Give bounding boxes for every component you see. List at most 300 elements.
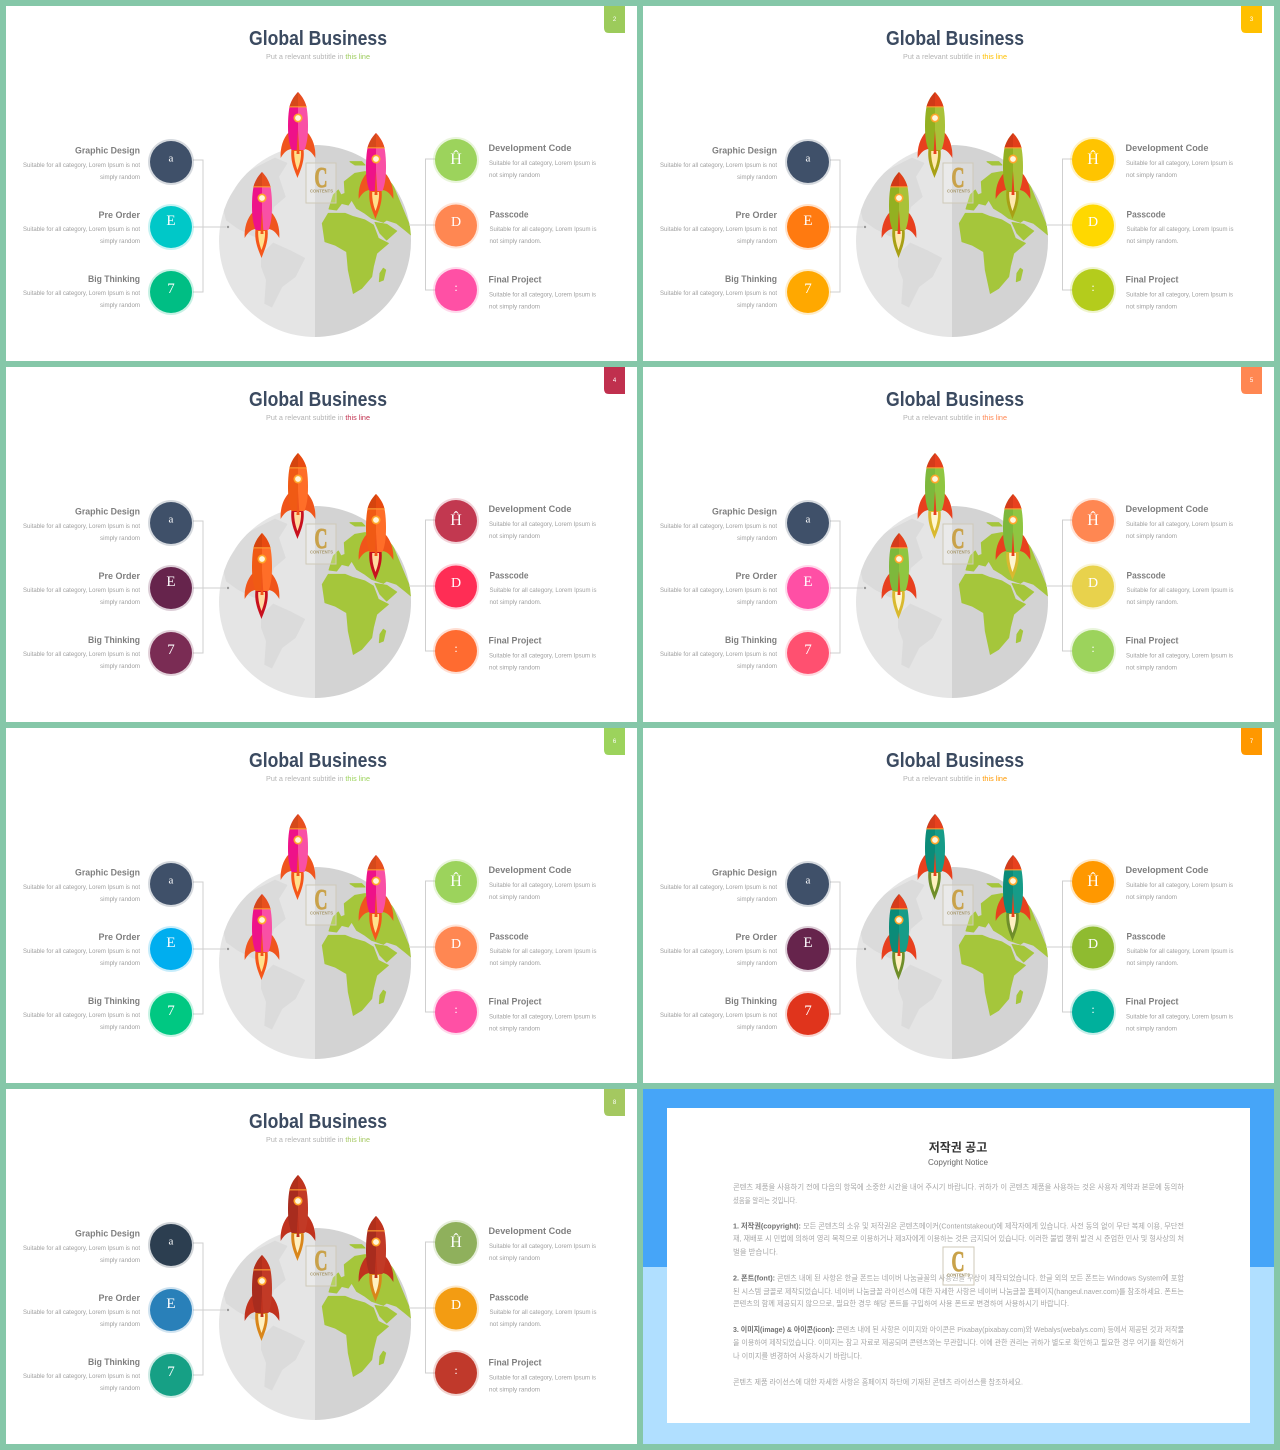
item: Graphic Design	[660, 868, 777, 903]
icon: Pre Order	[148, 926, 194, 972]
item: Development Code	[488, 865, 596, 901]
watermark logo: C	[314, 163, 328, 194]
item: Passcode: not simply random.	[490, 961, 542, 967]
icon: Graphic Design: a	[806, 514, 811, 526]
watermark logo: CONTENTS	[947, 550, 970, 554]
item: Final Project: Final Project	[488, 996, 542, 1008]
item: Pre Order: simply random	[737, 600, 777, 606]
slide 6	[6, 728, 637, 1083]
item: Big Thinking: simply random	[100, 1386, 140, 1392]
intro paragraph	[733, 1182, 1184, 1205]
item: Pre Order: simply random	[100, 961, 140, 967]
watermark logo: C	[952, 1247, 964, 1278]
item: Big Thinking	[23, 274, 140, 309]
title: Global Business	[249, 389, 387, 411]
item: Development Code: Development Code	[1126, 504, 1208, 515]
item: Passcode: Suitable for all category, Lorem Ipsum is	[1126, 588, 1234, 594]
globe map	[856, 867, 1052, 1059]
section 3: image and icon: 나 이미지를 변경하여 사용하시기 바랍니다.	[733, 1350, 862, 1360]
item: Graphic Design	[660, 146, 777, 181]
icon: Pre Order	[148, 565, 194, 611]
item: Development Code: not simply random	[489, 534, 540, 540]
rocket top	[918, 92, 952, 178]
icon: Passcode	[433, 564, 479, 610]
icon: Big Thinking	[148, 1352, 194, 1398]
item: Big Thinking: Suitable for all category, Lorem Ipsum is not	[23, 1374, 140, 1380]
icon: Development Code	[433, 1220, 479, 1266]
section 1: copyright: 벌을 받습니다.	[733, 1246, 778, 1256]
icon: Development Code: Ĥ	[450, 871, 462, 890]
item: Graphic Design: Graphic Design	[75, 1228, 140, 1240]
item: Graphic Design: simply random	[100, 175, 140, 181]
page tab	[604, 728, 625, 755]
section 2: font: 된 시스템 글꼴로 제작되었습니다. 네이버 나눔글꼴 라이선스에 대한 자세한 사항은 네이버 나눔글꼴 홈페이지(hangeul.naver.com)를 참조하세요. 폰트는	[733, 1286, 1184, 1296]
connector right	[1046, 520, 1073, 651]
item: Graphic Design: Graphic Design	[75, 868, 140, 878]
item: Graphic Design	[23, 1228, 140, 1264]
icon: Passcode	[433, 202, 479, 248]
page tab: 2	[613, 17, 617, 23]
icon: Final Project	[433, 1350, 479, 1396]
item: Development Code: not simply random	[489, 173, 540, 179]
item: Passcode: Passcode	[490, 570, 528, 582]
icon: Graphic Design: a	[169, 152, 174, 164]
icon: Final Project	[1070, 989, 1116, 1035]
globe map	[219, 867, 415, 1059]
item: Pre Order: Pre Order	[736, 210, 777, 221]
watermark logo	[306, 885, 336, 925]
connector left	[193, 160, 226, 292]
section 1: copyright: 재, 재배포 시 민법에 의하여 영리 목적으로 이용하거나 제3자에게 이용하는 것은 금지되어 있습니다. 이러한 불법 행위 발견 시 준엄한 민사 및 형사상의 처	[733, 1233, 1184, 1243]
item: Passcode	[1126, 570, 1234, 606]
slide panel	[643, 6, 1274, 361]
rocket right	[359, 133, 393, 219]
item: Graphic Design: Suitable for all category, Lorem Ipsum is not	[23, 524, 140, 530]
connector left	[193, 521, 226, 653]
section 3: image and icon	[733, 1324, 1184, 1360]
connector left	[193, 882, 226, 1014]
slide panel	[6, 6, 637, 361]
title: Global Business	[886, 389, 1024, 411]
watermark logo	[943, 524, 973, 564]
item: Big Thinking: Big Thinking	[88, 635, 140, 646]
icon: Big Thinking	[785, 269, 831, 315]
icon: Big Thinking	[148, 269, 194, 315]
item: Graphic Design: Suitable for all category, Lorem Ipsum is not	[660, 524, 777, 530]
icon: Passcode	[1070, 924, 1116, 970]
item: Development Code: Suitable for all category, Lorem Ipsum is	[489, 161, 596, 167]
item: Big Thinking: Suitable for all category, Lorem Ipsum is not	[660, 652, 777, 658]
item: Big Thinking	[23, 996, 140, 1031]
item: Passcode	[1126, 932, 1234, 967]
icon: Passcode: D	[451, 215, 461, 230]
item: Final Project: Suitable for all category, Lorem Ipsum is	[489, 292, 596, 298]
item: Final Project	[1126, 996, 1233, 1032]
rocket left	[245, 533, 279, 619]
section 3: image and icon: 3. 이미지(image) & 아이콘(icon): 콘텐츠 내에 된 사항은 이미지와 아이콘은 Pixabay(pixabay.com)와 Webalys(webalys.com) 등에서 제공된 것과 저작물	[733, 1324, 1184, 1334]
icon: Final Project	[433, 267, 479, 313]
icon: Final Project: :	[1091, 1002, 1095, 1016]
icon: Big Thinking: 7	[167, 1003, 175, 1019]
icon: Final Project: :	[1091, 280, 1095, 294]
page tab: 4	[613, 378, 617, 384]
item: Passcode: Suitable for all category, Lorem Ipsum is	[490, 1310, 596, 1316]
item: Final Project: not simply random	[1126, 1026, 1177, 1032]
page tab	[1241, 6, 1262, 33]
icon: Graphic Design: a	[169, 1236, 174, 1248]
item: Final Project: Final Project	[488, 636, 542, 646]
item: Graphic Design: simply random	[737, 536, 777, 542]
item: Final Project	[488, 996, 596, 1032]
item: Pre Order	[660, 571, 777, 606]
item: Passcode	[490, 570, 596, 606]
item: Pre Order: Suitable for all category, Lorem Ipsum is not	[660, 949, 777, 955]
icon: Final Project	[1070, 267, 1116, 313]
watermark logo: C	[314, 1246, 328, 1277]
icon: Big Thinking: 7	[804, 1003, 812, 1019]
watermark logo	[943, 163, 973, 203]
page tab	[1241, 728, 1262, 755]
globe map	[856, 506, 1052, 698]
icon: Graphic Design: a	[806, 152, 811, 164]
icon: Pre Order	[785, 926, 831, 972]
item: Final Project	[488, 274, 596, 310]
icon: Pre Order	[148, 204, 194, 250]
item: Final Project: Suitable for all category, Lorem Ipsum is	[489, 654, 596, 660]
section 1: copyright	[733, 1220, 1184, 1256]
connector right	[409, 520, 436, 651]
item: Passcode: Passcode	[490, 1292, 528, 1304]
item: Final Project: Final Project	[488, 1358, 542, 1368]
item: Development Code: Suitable for all category, Lorem Ipsum is	[489, 522, 596, 528]
item: Passcode: Passcode	[1126, 210, 1166, 220]
icon: Big Thinking	[148, 630, 194, 676]
item: Development Code	[488, 1226, 596, 1262]
title: Global Business	[249, 750, 387, 772]
item: Big Thinking: Big Thinking	[725, 274, 777, 285]
item: Pre Order: Suitable for all category, Lorem Ipsum is not	[660, 588, 777, 594]
item: Final Project: not simply random	[489, 666, 540, 672]
item: Development Code: Development Code	[488, 1226, 572, 1237]
item: Development Code: not simply random	[1126, 895, 1177, 901]
globe map	[219, 506, 415, 698]
item: Pre Order: simply random	[737, 961, 777, 967]
item: Graphic Design: Graphic Design	[712, 868, 777, 878]
item: Passcode	[490, 210, 596, 245]
item: Development Code	[488, 143, 596, 179]
icon: Final Project	[1070, 628, 1116, 674]
item: Development Code	[1126, 504, 1233, 540]
item: Development Code: Development Code	[1126, 143, 1208, 154]
item: Pre Order	[23, 571, 140, 606]
item: Final Project: Final Project	[1126, 636, 1179, 646]
rocket left	[882, 894, 916, 980]
icon: Big Thinking: 7	[167, 281, 175, 297]
icon: Pre Order: E	[803, 574, 813, 590]
icon: Graphic Design: a	[169, 874, 174, 886]
rocket right	[359, 494, 393, 580]
page tab: 3	[1250, 17, 1254, 23]
watermark logo: C	[952, 163, 964, 194]
watermark logo: C	[314, 885, 328, 916]
item: Big Thinking: Suitable for all category, Lorem Ipsum is not	[23, 291, 140, 297]
slide 8	[6, 1089, 637, 1444]
item: Pre Order: Suitable for all category, Lorem Ipsum is not	[23, 227, 140, 233]
item: Big Thinking: simply random	[100, 664, 140, 670]
item: Pre Order	[23, 932, 140, 967]
section 2: font: 콘텐츠의 함께 제공되지 않으므로, 필요한 경우 해당 폰트를 구입하여 사용 폰트로 변경하여 사용하시기 바랍니다.	[733, 1298, 1069, 1308]
blue background top	[643, 1089, 1274, 1267]
item: Graphic Design: simply random	[100, 897, 140, 903]
item: Passcode: not simply random.	[490, 239, 542, 245]
globe map	[856, 145, 1052, 337]
item: Development Code	[1126, 865, 1233, 901]
item: Graphic Design: Graphic Design	[712, 506, 777, 518]
page tab	[604, 1089, 625, 1116]
icon: Passcode	[433, 924, 479, 970]
connector arrow	[864, 587, 866, 589]
item: Pre Order: Suitable for all category, Lorem Ipsum is not	[23, 1310, 140, 1316]
item: Development Code: Suitable for all category, Lorem Ipsum is	[1126, 161, 1233, 167]
icon: Graphic Design	[785, 500, 831, 546]
item: Graphic Design: Graphic Design	[75, 506, 140, 518]
notice subtitle: Copyright Notice	[928, 1158, 989, 1167]
item: Passcode	[490, 932, 596, 967]
item: Big Thinking: Suitable for all category, Lorem Ipsum is not	[23, 1013, 140, 1019]
page tab: 8	[613, 1100, 617, 1106]
icon: Final Project: :	[454, 280, 458, 294]
watermark logo	[306, 524, 336, 564]
item: Graphic Design: simply random	[737, 175, 777, 181]
icon: Passcode	[1070, 564, 1116, 610]
item: Pre Order: simply random	[737, 239, 777, 245]
item: Passcode: Suitable for all category, Lorem Ipsum is	[490, 588, 596, 594]
icon: Development Code: Ĥ	[450, 149, 462, 168]
item: Final Project: Suitable for all category, Lorem Ipsum is	[1126, 1014, 1233, 1020]
icon: Passcode	[433, 1286, 479, 1332]
item: Pre Order: Pre Order	[98, 571, 140, 582]
icon: Development Code: Ĥ	[1087, 510, 1099, 529]
rocket left	[882, 533, 916, 619]
connector left	[830, 160, 863, 292]
icon: Final Project: :	[454, 1002, 458, 1016]
item: Final Project	[488, 1358, 596, 1394]
watermark logo	[943, 885, 973, 925]
title: Global Business	[249, 28, 387, 50]
icon: Pre Order	[785, 204, 831, 250]
item: Passcode: Suitable for all category, Lorem Ipsum is	[1126, 227, 1234, 233]
icon: Graphic Design	[148, 500, 194, 546]
icon: Passcode: D	[451, 937, 461, 952]
watermark logo: CONTENTS	[947, 188, 970, 194]
slide 9: copyright notice	[643, 1089, 1274, 1444]
item: Passcode: not simply random.	[490, 600, 542, 606]
blue background bottom	[643, 1267, 1274, 1444]
item: Final Project: not simply random	[1126, 304, 1177, 310]
slide panel	[6, 728, 637, 1083]
section 1: copyright: 1. 저작권(copyright): 모든 콘텐츠의 소유 및 저작권은 콘텐츠메이커(Contentstakeout)에 제작자에게 있습니다. 사전 동의 없이 무단 복제 이용, 무단전	[733, 1220, 1184, 1230]
watermark logo: CONTENTS	[310, 1272, 333, 1276]
item: Big Thinking	[23, 635, 140, 670]
item: Development Code: Development Code	[488, 504, 572, 515]
slide panel	[643, 367, 1274, 722]
watermark logo: CONTENTS	[947, 1272, 970, 1278]
icon: Big Thinking: 7	[804, 281, 812, 297]
subtitle: Put a relevant subtitle in this line	[266, 54, 370, 61]
item: Passcode: Suitable for all category, Lorem Ipsum is	[1126, 949, 1234, 955]
item: Final Project	[1126, 274, 1233, 310]
item: Development Code: Suitable for all category, Lorem Ipsum is	[1126, 522, 1233, 528]
connector arrow	[864, 226, 866, 228]
watermark logo	[306, 163, 336, 203]
icon: Development Code	[433, 137, 479, 183]
subtitle: Put a relevant subtitle in this line	[266, 776, 370, 783]
item: Big Thinking: Big Thinking	[88, 274, 140, 285]
slide 5	[643, 367, 1274, 722]
item: Graphic Design	[23, 868, 140, 903]
title: Global Business	[249, 1111, 387, 1133]
item: Big Thinking: simply random	[100, 303, 140, 309]
page tab: 5	[1250, 378, 1254, 384]
rocket left	[245, 894, 279, 980]
item: Final Project: Final Project	[488, 274, 542, 286]
item: Big Thinking: Big Thinking	[88, 1357, 140, 1368]
slide 2	[6, 6, 637, 361]
icon: Big Thinking	[785, 991, 831, 1037]
title: Global Business	[886, 750, 1024, 772]
watermark logo: CONTENTS	[310, 188, 333, 194]
icon: Pre Order	[785, 565, 831, 611]
connector right	[409, 159, 436, 290]
section 3: image and icon: 을 이용하여 제작되었습니다. 이미지는 참고 자료로 제공되며 콘텐츠와는 무관합니다. 이에 관한 권리는 귀하가 별도로 확인하고 필요한 경우 여기를 확인하거	[733, 1337, 1184, 1347]
item: Development Code	[488, 504, 596, 540]
item: Pre Order: Pre Order	[98, 932, 140, 943]
item: Passcode: Passcode	[1126, 570, 1166, 582]
slide 7	[643, 728, 1274, 1083]
icon: Pre Order: E	[803, 935, 813, 951]
watermark logo: CONTENTS	[947, 910, 970, 916]
globe map	[219, 145, 415, 337]
item: Passcode: not simply random.	[1126, 239, 1179, 245]
watermark logo: C	[952, 885, 964, 916]
rocket left	[882, 172, 916, 258]
item: Development Code	[1126, 143, 1233, 179]
item: Pre Order: Pre Order	[98, 210, 140, 221]
item: Big Thinking	[23, 1357, 140, 1392]
item: Big Thinking: Suitable for all category, Lorem Ipsum is not	[660, 1013, 777, 1019]
icon: Passcode: D	[1088, 576, 1098, 591]
item: Passcode: Passcode	[1126, 932, 1166, 942]
rocket right	[996, 494, 1030, 580]
connector arrow	[864, 948, 866, 950]
item: Graphic Design: simply random	[737, 897, 777, 903]
icon: Big Thinking: 7	[167, 642, 175, 658]
notice title: 저작권 공고	[929, 1140, 987, 1154]
item: Big Thinking: simply random	[737, 664, 777, 670]
white notice panel	[667, 1108, 1250, 1423]
section 2: font: 2. 폰트(font): 콘텐츠 내에 된 사항은 한글 폰트는 네이버 나눔글꼴의 사용권을 무상이 제작되었습니다. 한글 외의 모든 폰트는 Windows System에 포함	[733, 1272, 1184, 1282]
item: Development Code: Development Code	[488, 143, 572, 154]
item: Final Project: not simply random	[489, 1026, 540, 1032]
rocket top	[918, 814, 952, 900]
item: Big Thinking: simply random	[100, 1025, 140, 1031]
connector left	[830, 882, 863, 1014]
icon: Graphic Design	[148, 139, 194, 185]
icon: Big Thinking: 7	[167, 1364, 175, 1380]
icon: Passcode: D	[451, 1298, 461, 1313]
item: Big Thinking: simply random	[737, 1025, 777, 1031]
connector arrow	[227, 948, 229, 950]
rocket right	[359, 855, 393, 941]
icon: Development Code	[433, 859, 479, 905]
rocket left	[245, 172, 279, 258]
slide panel	[643, 728, 1274, 1083]
item: Development Code: Suitable for all category, Lorem Ipsum is	[1126, 883, 1233, 889]
item: Passcode: Suitable for all category, Lorem Ipsum is	[490, 949, 596, 955]
item: Final Project: not simply random	[489, 304, 540, 310]
item: Pre Order: simply random	[100, 1322, 140, 1328]
rocket left	[245, 1255, 279, 1341]
item: Development Code: not simply random	[1126, 534, 1177, 540]
item: Development Code: not simply random	[1126, 173, 1177, 179]
watermark logo: C	[314, 524, 328, 555]
icon: Pre Order: E	[166, 935, 176, 951]
item: Graphic Design: Suitable for all category, Lorem Ipsum is not	[660, 885, 777, 891]
rocket top	[918, 453, 952, 539]
item: Development Code: Development Code	[1126, 865, 1208, 876]
item: Pre Order: Suitable for all category, Lorem Ipsum is not	[23, 588, 140, 594]
item: Passcode: Passcode	[490, 210, 528, 220]
item: Passcode: not simply random.	[1126, 600, 1179, 606]
icon: Final Project: :	[454, 641, 458, 655]
page tab	[1241, 367, 1262, 394]
rocket right	[996, 133, 1030, 219]
icon: Big Thinking	[148, 991, 194, 1037]
item: Pre Order	[23, 1293, 140, 1328]
icon: Pre Order: E	[803, 213, 813, 229]
watermark logo: CONTENTS	[310, 910, 333, 916]
item: Big Thinking: Suitable for all category, Lorem Ipsum is not	[23, 652, 140, 658]
item: Graphic Design: simply random	[100, 1258, 140, 1264]
icon: Pre Order: E	[166, 213, 176, 229]
item: Graphic Design: simply random	[100, 536, 140, 542]
connector arrow	[227, 587, 229, 589]
page tab: 7	[1250, 739, 1254, 745]
item: Graphic Design: Suitable for all category, Lorem Ipsum is not	[23, 1246, 140, 1252]
page tab	[604, 6, 625, 33]
intro paragraph: 셨음을 알리는 것입니다.	[733, 1195, 797, 1205]
item: Big Thinking: Big Thinking	[725, 996, 777, 1007]
closing paragraph: 콘텐츠 제품 라이선스에 대한 자세한 사항은 홈페이지 하단에 기재된 콘텐츠 라이선스를 참조하세요.	[733, 1376, 1023, 1386]
item: Passcode: not simply random.	[1126, 961, 1179, 967]
item: Passcode: Suitable for all category, Lorem Ipsum is	[490, 227, 596, 233]
item: Big Thinking	[660, 996, 777, 1031]
connector left	[830, 521, 863, 653]
icon: Pre Order	[148, 1287, 194, 1333]
item: Big Thinking: Suitable for all category, Lorem Ipsum is not	[660, 291, 777, 297]
item: Development Code: Development Code	[488, 865, 572, 876]
item: Big Thinking	[660, 274, 777, 309]
item: Big Thinking: Big Thinking	[725, 635, 777, 646]
item: Big Thinking: Big Thinking	[88, 996, 140, 1007]
icon: Graphic Design	[785, 139, 831, 185]
icon: Final Project	[433, 628, 479, 674]
subtitle: Put a relevant subtitle in this line	[903, 54, 1007, 61]
icon: Development Code	[1070, 137, 1116, 183]
subtitle: Put a relevant subtitle in this line	[266, 1137, 370, 1144]
icon: Pre Order: E	[166, 1296, 176, 1312]
item: Graphic Design	[23, 146, 140, 181]
